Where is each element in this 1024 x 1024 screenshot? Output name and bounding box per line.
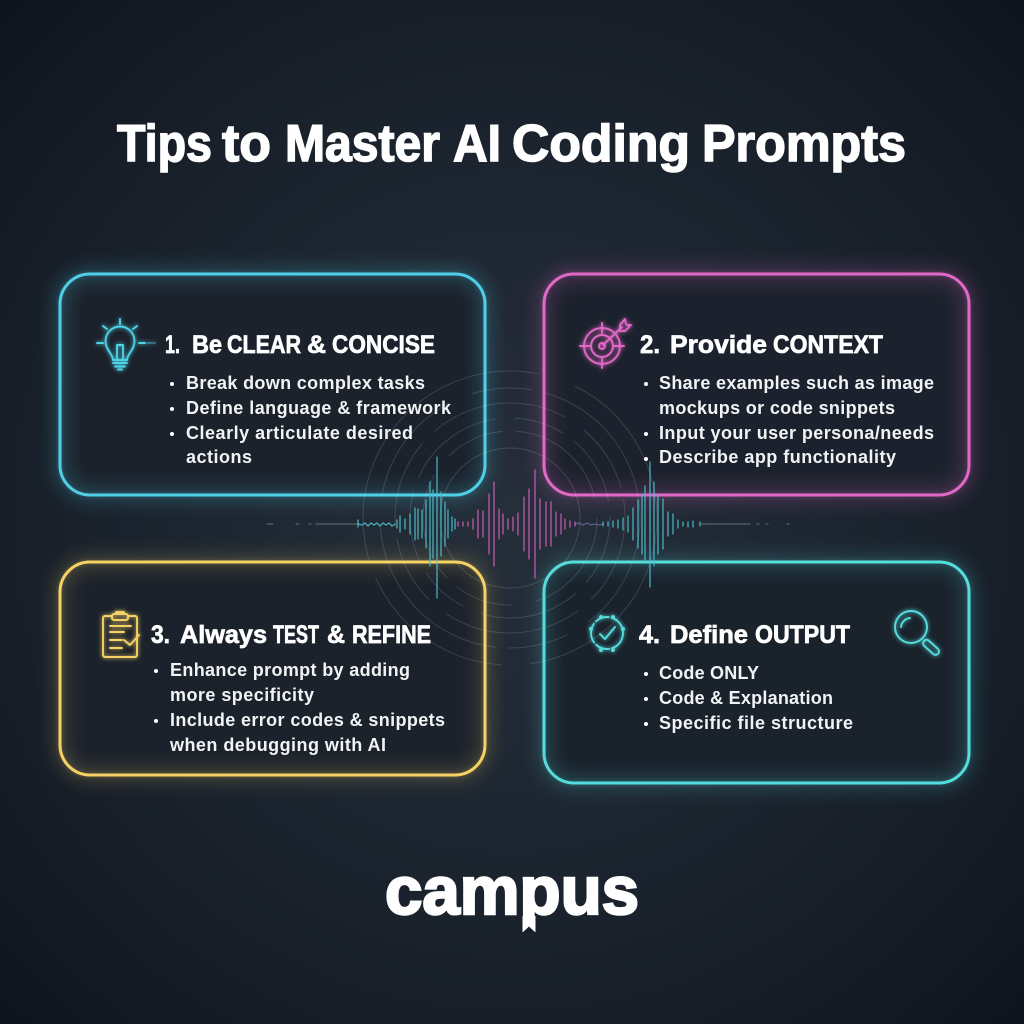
panel: 1 card frame [60, 274, 485, 495]
heading 4: OUTPUT [755, 621, 850, 649]
heading 3: TEST [273, 621, 319, 649]
title: Prompts [702, 115, 906, 173]
heading 1 [165, 331, 435, 359]
title: Tips [117, 115, 212, 173]
heading 3: 3. [151, 621, 170, 649]
heading 1: & [307, 331, 326, 359]
panel: 2 card frame [544, 274, 969, 495]
icon: light bulb [97, 319, 155, 370]
bullet list 4 [644, 663, 853, 733]
bullet list 3: more specificity [170, 685, 314, 705]
bullet list 1: Break down complex tasks [186, 373, 425, 393]
waveform [267, 457, 789, 598]
heading 3: Always [180, 621, 267, 649]
bullet list 4: Specific file structure [659, 713, 853, 733]
title [117, 115, 906, 173]
heading 2: 2. [640, 331, 660, 359]
bullet list 3: when debugging with AI [169, 735, 386, 755]
bullet list 1 [170, 373, 452, 467]
panel: 4 card frame [544, 562, 969, 783]
icon: gear check [590, 616, 624, 651]
title: Master [285, 115, 440, 173]
heading 1: Be [192, 331, 222, 359]
heading 3: & [327, 621, 345, 649]
heading 3: REFINE [352, 621, 431, 649]
title: Coding [512, 115, 690, 173]
bullet list 2: mockups or code snippets [659, 398, 895, 418]
panel: 3 card frame [60, 562, 485, 775]
bullet list 1: actions [186, 447, 252, 467]
heading 3 [151, 621, 431, 649]
title: to [222, 115, 271, 173]
bullet list 2 [644, 373, 934, 467]
heading 4: Define [670, 621, 748, 649]
heading 4: 4. [639, 621, 660, 649]
logo: campus: campus [385, 853, 639, 929]
title: AI [453, 115, 501, 173]
concentric sound rings [363, 371, 657, 665]
heading 1: 1. [165, 331, 180, 359]
bullet list 1: Define language & framework [186, 398, 452, 418]
bullet list 4: Code ONLY [659, 663, 759, 683]
heading 2 [640, 331, 883, 359]
bullet list 2: Share examples such as image [659, 373, 934, 393]
heading 2: CONTEXT [773, 331, 883, 359]
heading 1: CLEAR [227, 331, 301, 359]
bullet list 3: Include error codes & snippets [170, 710, 445, 730]
icon: magnifier [895, 611, 940, 656]
icon: clipboard [103, 612, 139, 657]
icon: target [580, 319, 631, 368]
bullet list 2: Describe app functionality [659, 447, 896, 467]
heading 1: CONCISE [332, 331, 435, 359]
bullet list 3: Enhance prompt by adding [170, 660, 410, 680]
bullet list 1: Clearly articulate desired [186, 423, 413, 443]
heading 4 [639, 621, 850, 649]
bullet list 4: Code & Explanation [659, 688, 833, 708]
bullet list 2: Input your user persona/needs [659, 423, 934, 443]
bullet list 3 [154, 660, 445, 755]
heading 2: Provide [670, 331, 767, 359]
